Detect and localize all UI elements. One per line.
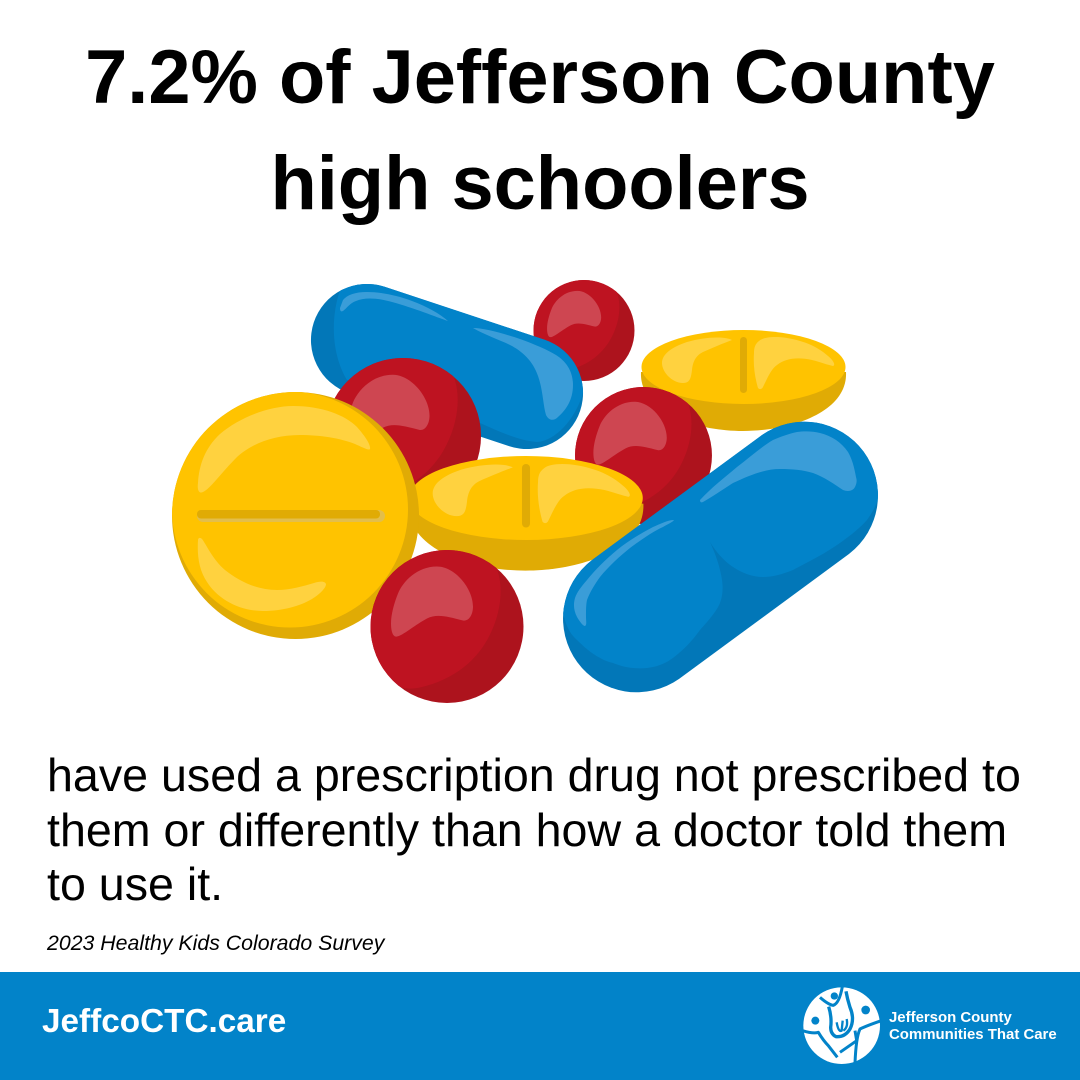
red pill, right [575, 387, 712, 524]
blue capsule, large [563, 422, 878, 692]
body text: to use it. [47, 858, 223, 910]
title [85, 35, 995, 226]
illustration: pile of pills [172, 280, 878, 703]
logo icon: people in a circle [803, 987, 880, 1064]
title: high schoolers [270, 141, 810, 226]
footer band [0, 972, 1080, 1080]
footer url: JeffcoCTC.care [42, 1003, 286, 1040]
body text: them or differently than how a doctor told them [47, 804, 1007, 856]
logo text [889, 1009, 1057, 1042]
body text: have used a prescription drug not prescribed to [47, 749, 1021, 801]
body text [47, 749, 1021, 910]
source note: 2023 Healthy Kids Colorado Survey [47, 931, 384, 955]
title: 7.2% of Jefferson County [85, 35, 995, 120]
red pill, bottom [370, 550, 524, 703]
yellow tablet, upper right [641, 330, 846, 431]
large yellow tablet [172, 392, 419, 639]
blue capsule, top [310, 284, 584, 449]
red pill, left [334, 358, 481, 485]
logo text: Communities That Care [889, 1026, 1057, 1042]
small red pill [534, 280, 634, 381]
yellow tablet, middle [409, 456, 643, 571]
logo text: Jefferson County [889, 1009, 1012, 1026]
